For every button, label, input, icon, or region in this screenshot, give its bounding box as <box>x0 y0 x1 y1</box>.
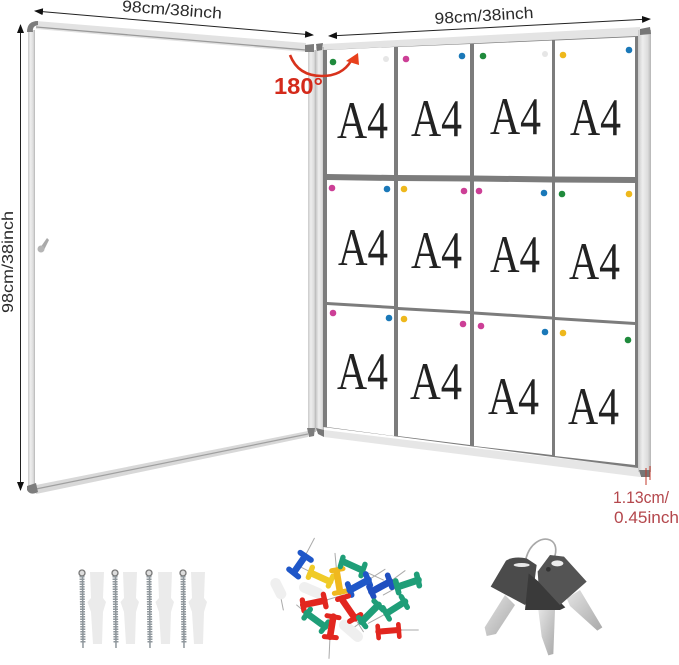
icon: keys <box>485 539 602 655</box>
screw and plug 2 <box>112 570 139 648</box>
key ring <box>526 539 556 558</box>
sheet row 2 col 2: A4 <box>411 222 462 280</box>
sheet row 1 col 1 <box>327 47 394 175</box>
icon: push pins <box>276 538 419 658</box>
screw and plug 3 <box>146 570 174 648</box>
door right rail <box>308 50 316 432</box>
door lock <box>38 238 49 252</box>
dimension: board width <box>329 5 650 36</box>
panel: open door (left) <box>27 21 316 494</box>
dimension: frame depth: 1.13cm/ <box>613 489 669 507</box>
sheet row 1 col 2: A4 <box>411 90 462 148</box>
sheet row 2 col 3 <box>474 182 552 316</box>
key: left <box>485 558 537 636</box>
arrow: 180 degree opening <box>290 53 359 76</box>
dimension: board width: 98cm/38inch <box>434 5 534 28</box>
sheet row 2 col 4: A4 <box>569 233 620 291</box>
screw and plug 4 <box>180 570 207 648</box>
door left rail <box>28 30 35 486</box>
sheet row 3 col 4 <box>555 320 635 465</box>
board frame rails <box>316 27 651 477</box>
sheet row 3 col 1 <box>327 305 394 436</box>
sheet row 2 col 1: A4 <box>338 219 388 277</box>
sheet row 1 col 1: A4 <box>337 92 388 150</box>
sheet row 3 col 1: A4 <box>337 343 388 401</box>
sheet row 2 col 1 <box>327 180 394 306</box>
sheet row 3 col 4: A4 <box>568 378 619 436</box>
key: middle <box>525 573 565 655</box>
sheet row 1 col 2 <box>398 44 470 176</box>
panel: board (right) <box>316 27 651 477</box>
icon: wall screws and plugs <box>79 570 207 648</box>
screw and plug 1 <box>79 570 106 648</box>
board corner caps <box>316 27 651 477</box>
label: 180 degrees: 180° <box>274 73 323 99</box>
sheet row 3 col 2 <box>398 310 470 445</box>
sheet row 1 col 3 <box>474 40 552 176</box>
sheet row 1 col 3: A4 <box>490 88 541 146</box>
sheet row 3 col 2: A4 <box>410 353 462 411</box>
sheet row 2 col 2 <box>398 181 470 311</box>
dimension: door width <box>35 0 313 35</box>
dimension: height: 98cm/38inch <box>0 211 17 313</box>
dimension: frame depth <box>613 466 679 527</box>
key: right <box>538 555 587 605</box>
key: right blade <box>567 590 602 631</box>
door corner caps <box>27 21 315 494</box>
sheet row 3 col 3 <box>474 314 552 455</box>
sheet row 1 col 4: A4 <box>570 89 621 147</box>
door top rail <box>36 21 306 52</box>
sheet row 1 col 4 <box>555 37 635 177</box>
sheet row 2 col 4 <box>555 182 635 322</box>
door bottom rail <box>36 431 308 494</box>
dimension: frame depth: 0.45inch <box>614 509 679 527</box>
sheet row 3 col 3: A4 <box>488 368 539 426</box>
sheet row 2 col 3: A4 <box>490 226 540 284</box>
